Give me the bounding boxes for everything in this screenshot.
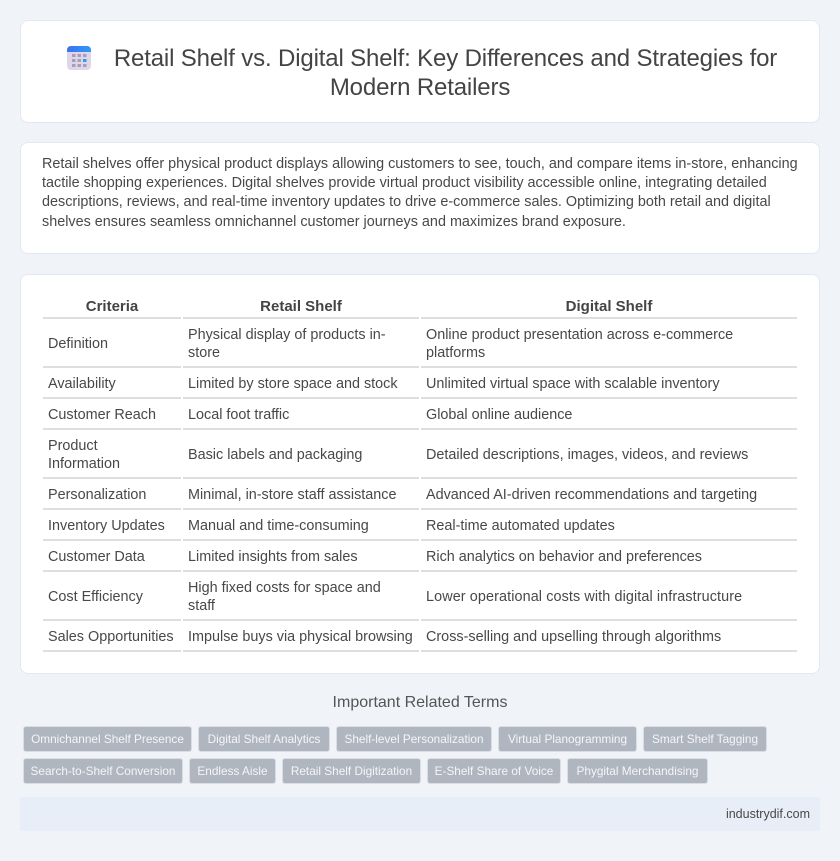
row: Product Information: Information — [48, 456, 120, 472]
table header: Digital Shelf — [566, 298, 652, 315]
panel: introduction — [20, 142, 820, 254]
row: Customer Reach — [48, 407, 572, 423]
row: Cost Efficiency: staff — [188, 598, 215, 614]
tag — [336, 726, 492, 752]
row: Customer Data — [48, 549, 702, 565]
tag: E-Shelf Share of Voice — [435, 764, 553, 778]
title: Retail Shelf vs. Digital Shelf: Key Differences and Strategies for — [114, 45, 777, 72]
icon: calendar grid — [67, 46, 91, 70]
row: Customer Data: Rich analytics on behavior and preferences — [426, 549, 702, 565]
title — [114, 45, 777, 101]
row: Cost Efficiency: Lower operational costs with digital infrastructure — [426, 589, 742, 605]
tag — [198, 726, 330, 752]
tag — [23, 726, 192, 752]
comparison table — [43, 298, 797, 652]
row: Sales Opportunities — [48, 629, 721, 645]
row: Product Information: Detailed descriptions, images, videos, and reviews — [426, 447, 748, 463]
table header — [86, 298, 652, 315]
tag: Endless Aisle — [197, 764, 268, 778]
row: Customer Reach: Customer Reach — [48, 407, 156, 423]
tag — [189, 758, 276, 784]
row: Inventory Updates: Inventory Updates — [48, 518, 165, 534]
row: Personalization: Advanced AI-driven recommendations and targeting — [426, 487, 757, 503]
text block: introduction: descriptions, reviews, and real-time inventory updates to drive e-commerce sales. Optimizing both retail and digital — [42, 194, 771, 210]
row: Availability: Availability — [48, 376, 116, 392]
row: Sales Opportunities: Impulse buys via physical browsing — [188, 629, 413, 645]
row: Personalization: Personalization — [48, 487, 146, 503]
tag — [282, 758, 421, 784]
tag: Search-to-Shelf Conversion — [31, 764, 175, 778]
row: Personalization: Minimal, in-store staff assistance — [188, 487, 396, 503]
row: Personalization — [48, 487, 757, 503]
tag — [427, 758, 561, 784]
tag: Digital Shelf Analytics — [208, 732, 320, 746]
tag — [567, 758, 708, 784]
row: Inventory Updates — [48, 518, 615, 534]
row: Product Information: Product — [48, 438, 98, 454]
row: Definition — [48, 327, 733, 361]
heading: Important Related Terms: Important Related Terms — [333, 694, 507, 711]
footer source text: industrydif.com — [726, 807, 810, 821]
row: Definition: platforms — [426, 345, 485, 361]
row: Definition: store — [188, 345, 220, 361]
row: Availability — [48, 376, 720, 392]
tag — [498, 726, 637, 752]
table header: Criteria — [86, 298, 138, 315]
text block: introduction: shelves ensures seamless omnichannel customer journeys and maximizes brand exposure. — [42, 214, 626, 230]
row: Customer Reach: Local foot traffic — [188, 407, 289, 423]
row: Availability: Unlimited virtual space with scalable inventory — [426, 376, 720, 392]
row: Definition: Online product presentation across e-commerce — [426, 327, 733, 343]
tag: Shelf-level Personalization — [344, 732, 484, 746]
panel: comparison table — [20, 274, 820, 674]
row: Inventory Updates: Real-time automated updates — [426, 518, 615, 534]
panel: title header — [20, 20, 820, 123]
row: Inventory Updates: Manual and time-consuming — [188, 518, 369, 534]
row: Product Information — [48, 438, 748, 472]
row: Cost Efficiency: High fixed costs for space and — [188, 580, 381, 596]
text block: introduction — [42, 156, 798, 230]
row: Availability: Limited by store space and stock — [188, 376, 398, 392]
title: Modern Retailers — [330, 74, 510, 101]
row: Cost Efficiency: Cost Efficiency — [48, 589, 143, 605]
related term tags — [23, 726, 767, 784]
tag: Virtual Planogramming — [508, 732, 627, 746]
row: Definition: Definition — [48, 336, 108, 352]
text block: introduction: tactile shopping experiences. Digital shelves provide virtual product visibility accessible online, integrating detailed — [42, 175, 767, 191]
tag — [23, 758, 183, 784]
row: Product Information: Basic labels and packaging — [188, 447, 362, 463]
text block: introduction: Retail shelves offer physical product displays allowing customers to see, touch, and compare items in-store, enhancing — [42, 156, 798, 172]
tag — [643, 726, 767, 752]
tag: Omnichannel Shelf Presence — [31, 732, 184, 746]
row: Cost Efficiency — [48, 580, 742, 614]
tag: Smart Shelf Tagging — [652, 732, 758, 746]
row: Customer Reach: Global online audience — [426, 407, 572, 423]
row: Customer Data: Customer Data — [48, 549, 145, 565]
footer bar — [20, 797, 820, 831]
row: Sales Opportunities: Sales Opportunities — [48, 629, 174, 645]
tag: Phygital Merchandising — [577, 764, 698, 778]
tag: Retail Shelf Digitization — [291, 764, 412, 778]
row: Customer Data: Limited insights from sales — [188, 549, 358, 565]
table header: Retail Shelf — [260, 298, 342, 315]
row: Definition: Physical display of products in- — [188, 327, 386, 343]
row: Sales Opportunities: Cross-selling and upselling through algorithms — [426, 629, 721, 645]
